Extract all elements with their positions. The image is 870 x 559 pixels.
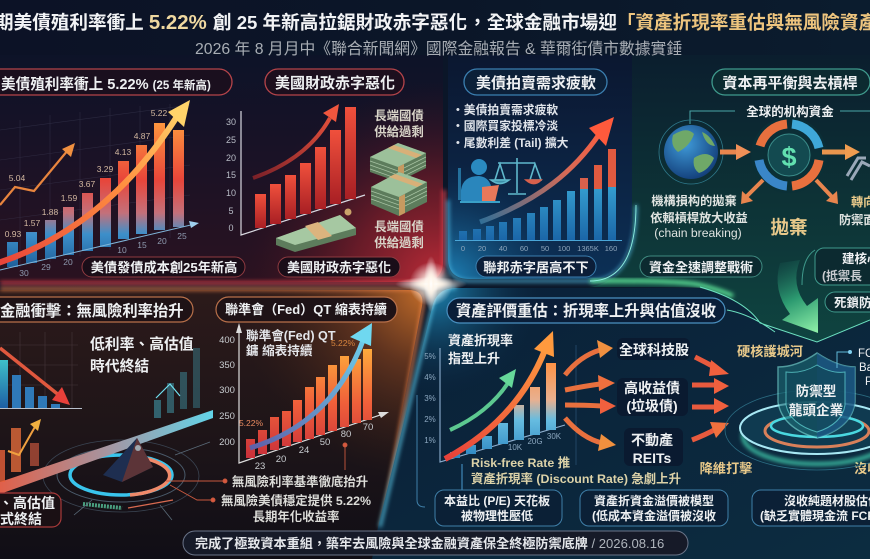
rings [43,440,210,520]
bar chart: deficit: 0 [228,223,234,233]
pill: risk-free rate shock: 金融衝擊：無風險利率抬升 [0,302,184,320]
bar chart: auction: 40 [499,244,507,253]
text: turn to defense [839,194,870,227]
bar chart: Fed QT: 350 [219,360,235,371]
panel: financial shock [0,289,423,559]
bar chart: discount rate: 2% [424,415,436,424]
node: high-yield bonds: 高收益債 [624,380,680,396]
bar chart: auction: 100 [558,244,570,253]
pill: asset revaluation heading: 資產評價重估：折現率上升與估值沒收 [456,302,716,320]
value labels: 4.13 [115,147,132,157]
value labels: 3.29 [97,164,114,174]
text: discount rate rising [448,333,513,366]
bar chart: discount rate: 4% [424,373,436,382]
bar chart: Fed QT: 24 [299,445,309,456]
bottom banner: 完成了極致資本重組，築牢去風險與全球金融資產保全終極防禦底牌 / 2026.08.16 [195,535,664,551]
text: institutions abandon leverage: (chain breaking) [654,226,742,240]
text: low-rate era ended [90,335,194,375]
pill: rebalancing heading [712,69,870,95]
icon: scale [491,158,541,194]
box: premium confiscated: (低成本資金溢價被沒收 [592,508,716,523]
icon: fund ring: $ [781,142,797,172]
node: real estate REITs [624,428,683,466]
bar chart: Fed QT: 23 [255,461,265,472]
bar chart: deficit: 5 [228,206,234,216]
notes: risk-free benchmark: 無風險美債穩定提供 5.22% [221,493,371,508]
node: global tech stocks: 全球科技股 [619,342,689,358]
box: PE ceiling [435,490,562,526]
arrow: ring to right [822,144,860,160]
label: long-end supply upper: 長端國債 [374,108,424,123]
arrow: orange trend [445,331,554,459]
callout box: low rate era [0,493,61,527]
label: long-end supply upper: 供給過剩 [374,124,424,139]
bar chart: deficit: 30 [226,117,236,127]
text: discount rate rising: 資產折現率 [448,333,513,348]
label: long-end supply upper [374,108,424,139]
label: long-end supply lower: 供給過剩 [374,235,424,250]
notes: risk-free benchmark: 無風險利率基準徹底抬升 [232,474,368,489]
arrow: big green flow [778,260,818,333]
text: low-rate era ended: 低利率、高估值 [90,335,194,353]
callout: FCF balance [837,348,870,388]
chart grid [0,104,190,268]
box: premium confiscated [580,490,728,526]
label: hardcore moat: 硬核護城河 [737,343,803,359]
pill: yield heading: 美債殖利率衝上 5.22% (25 年新高) [1,75,211,93]
text: risk-free rate push: Risk-free Rate 推 [471,455,570,470]
bar chart: deficit: 25 [226,135,236,145]
bar chart: Fed QT: 250 [219,411,235,422]
pill: auction heading: 美債拍賣需求疲軟 [476,74,596,92]
label: long-end supply lower [374,219,424,250]
pill: auction heading [464,69,607,95]
box: core holdings: (抵禦長 [822,268,862,283]
bar chart: auction: 1365K [577,244,599,253]
title: 期美債殖利率衝上 5.22% 創 25 年新高拉鋸財政赤字惡化，全球金融市場迎「資產折現率重估與無風險資產 [0,12,870,34]
arrow: falling [0,348,70,405]
value labels: 1.57 [24,218,41,228]
arrow: deficit rising [253,104,339,178]
bar chart: auction: 0 [461,244,465,253]
node: global tech stocks [617,338,690,360]
icon: cash stack flat [276,208,356,252]
chart grid [0,332,78,408]
value labels: 15 [137,240,147,250]
pill: deficit caption [278,257,400,277]
icon: fund ring [751,117,827,193]
pill: rapid tactical shift [640,256,762,277]
subtitle: 2026 年 8 月月中《聯合新聞網》國際金融報告 & 華爾街債市數據實錘 [195,39,682,58]
bar chart: auction: 160 [605,244,617,253]
mini chart: cyan bars on beam [154,348,200,418]
node: high-yield bonds [617,378,688,416]
text: institutions abandon leverage: 依賴槓桿放大收益 [650,210,748,225]
pill: deficit heading: 美國財政赤字惡化 [275,74,395,92]
arrow: big yield curve [0,100,190,264]
arrow: globe to fund ring [720,144,751,160]
value labels: 3.67 [79,179,96,189]
panel: auction demand [448,55,733,296]
value labels: 10 [117,245,127,255]
bullet list [452,103,569,150]
text: Fed QT label: 聯準會(Fed) QT [246,328,336,343]
bar chart: Fed QT: 5.22% [331,338,355,348]
pill: risk-free rate shock [0,297,193,322]
pill: deficit heading [265,69,404,95]
pill: Fed QT [216,297,397,322]
icon: cash stack upper [370,143,426,182]
bar chart: auction: 60 [520,244,528,253]
bar chart: deficit: 20 [226,153,236,163]
value labels: 1.59 [61,193,78,203]
bar chart: discount rate: 1% [424,436,436,445]
arrow: ring to abandon left [741,180,763,204]
bullet list: ・尾數利差 (Tail) 擴大 [452,136,569,150]
pill: dead-lock defense [825,292,870,312]
bar chart: discount rate [424,345,576,465]
value labels: 30 [19,268,29,278]
icon: shield [778,353,855,438]
label: global institutional funds [690,104,870,124]
center starburst [395,256,467,312]
decorative wave [700,287,870,342]
bar chart: discount rate: 3% [424,394,436,403]
label: abandon: 拋棄 [770,217,808,238]
callout box: low rate era: 式終結 [0,511,42,527]
bar chart: Fed QT: 50 [320,437,330,448]
pill: deficit caption: 美國財政赤字惡化 [287,260,391,275]
value labels: 0.93 [5,229,22,239]
text: Fed QT label [246,328,336,358]
bar chart: auction [455,149,622,253]
bar chart: Fed QT: 5.22% [239,418,263,428]
box: PE ceiling: 被物理性壓低 [461,508,533,523]
text: institutions abandon leverage [650,193,748,240]
icon: shield: 防禦型 [796,383,836,399]
label: long-end supply lower: 長端國債 [374,219,424,234]
fulcrum [103,438,153,482]
arrow: ring to abandon right [816,180,838,204]
bar chart: Fed QT: 200 [219,437,235,448]
icon: shield: 龍頭企業 [789,402,843,418]
mini chart: orange bars on beam [0,419,41,482]
value labels: 20 [157,236,167,246]
bar chart: discount rate: 30K [547,432,562,441]
text: risk-free rate push [471,455,681,486]
bar chart: Fed QT [219,323,389,472]
bar chart: discount rate: 10K [508,443,523,452]
connector lines [166,443,347,502]
arrows: outflow to moat [692,357,716,440]
bar chart: Fed QT: 70 [363,422,373,433]
bar chart: discount rate: 5% [424,352,436,361]
value labels: 4.87 [134,131,151,141]
arrow: green trend [450,369,516,430]
pill: federal deficit [476,256,596,277]
node: real estate REITs: REITs [633,450,672,466]
arrowheads: outflow [709,360,729,438]
pill: yield heading [0,69,232,95]
pill: asset revaluation heading [447,298,725,323]
text: discount rate rising: 指型上升 [448,351,500,366]
arrow: small yield line [0,143,75,205]
pill: rebalancing heading: 資本再平衡與去槓桿 [722,74,858,92]
pill: Fed QT: 聯準會（Fed）QT 縮表持續 [225,302,387,317]
bar chart: Fed QT: 300 [219,385,235,396]
text: risk-free rate push: 資產折現率 (Discount Rate) 急劇上升 [471,471,681,486]
text: low-rate era ended: 時代終結 [90,357,149,375]
value labels: 5.04 [9,173,26,183]
label: global institutional funds: 全球的机构資金 [746,104,834,119]
arrow: Fed QT rising [250,323,372,448]
pill: issuance cost [82,257,245,277]
node: real estate REITs: 不動產 [631,432,673,448]
bullet list: ・美債拍賣需求疲軟 [452,103,558,117]
panel: asset revaluation [372,287,870,559]
bar chart: falling valuation [0,360,82,408]
box: core holdings [802,248,870,285]
icon: analyst hologram [458,159,500,203]
panel: rebalancing [590,55,870,342]
value labels: 25 [177,231,187,241]
node: high-yield bonds: (垃圾債) [626,398,678,414]
panel: treasury yield and deficit [0,55,444,283]
bottom banner [183,531,688,555]
arrows: inflow to asset classes [565,350,602,443]
bar chart: Fed QT: 20 [276,454,286,465]
bar chart: deficit: 15 [226,170,236,180]
value labels: 29 [41,262,51,272]
text: Fed QT label: 鏞 縮表持續 [246,343,313,358]
bar chart: deficit: 10 [226,188,236,198]
box: theme stock valuation [752,490,870,526]
box: PE ceiling: 本益比 (P/E) 天花板 [444,493,550,508]
value labels: 5.22 [151,108,168,118]
icon: seesaw [0,410,213,520]
text: institutions abandon leverage: 機構損构的拋棄 [651,193,737,208]
bar chart: discount rate: 20G [527,437,543,446]
bar chart: deficit [226,107,365,235]
box: premium confiscated: 資產折資金溢價被模型 [594,493,714,508]
value labels [5,108,187,278]
bar chart: Fed QT: 400 [219,335,235,346]
icon: globe [659,120,723,184]
icon: broken chain [847,158,870,180]
icon: cash stack lower [371,172,427,216]
value labels: 1.88 [42,207,59,217]
bar chart: auction: 50 [541,244,549,253]
icon: defense platform rings [725,390,870,470]
callout box: low rate era: 、高估值 [0,495,55,511]
arrow: auction rising [480,117,614,222]
bar chart: auction: 20 [478,244,486,253]
seesaw beam [0,410,213,494]
bar chart: yield [0,123,199,270]
notes: risk-free benchmark [221,474,371,524]
value labels: 20 [63,257,73,267]
bar chart: Fed QT: 80 [341,429,351,440]
pill: issuance cost: 美債發債成本創25年新高 [91,259,237,275]
pill: rapid tactical shift: 資金全速調整戰術 [649,260,753,275]
notes: risk-free benchmark: 長期年化收益率 [253,509,339,524]
label: dimensional strike: 降維打擊 [700,460,752,476]
pill: federal deficit: 聯邦赤字居高不下 [483,259,589,275]
arrowheads: inflow [597,340,616,451]
bullet list: ・國際買家投標冷淡 [452,119,558,133]
